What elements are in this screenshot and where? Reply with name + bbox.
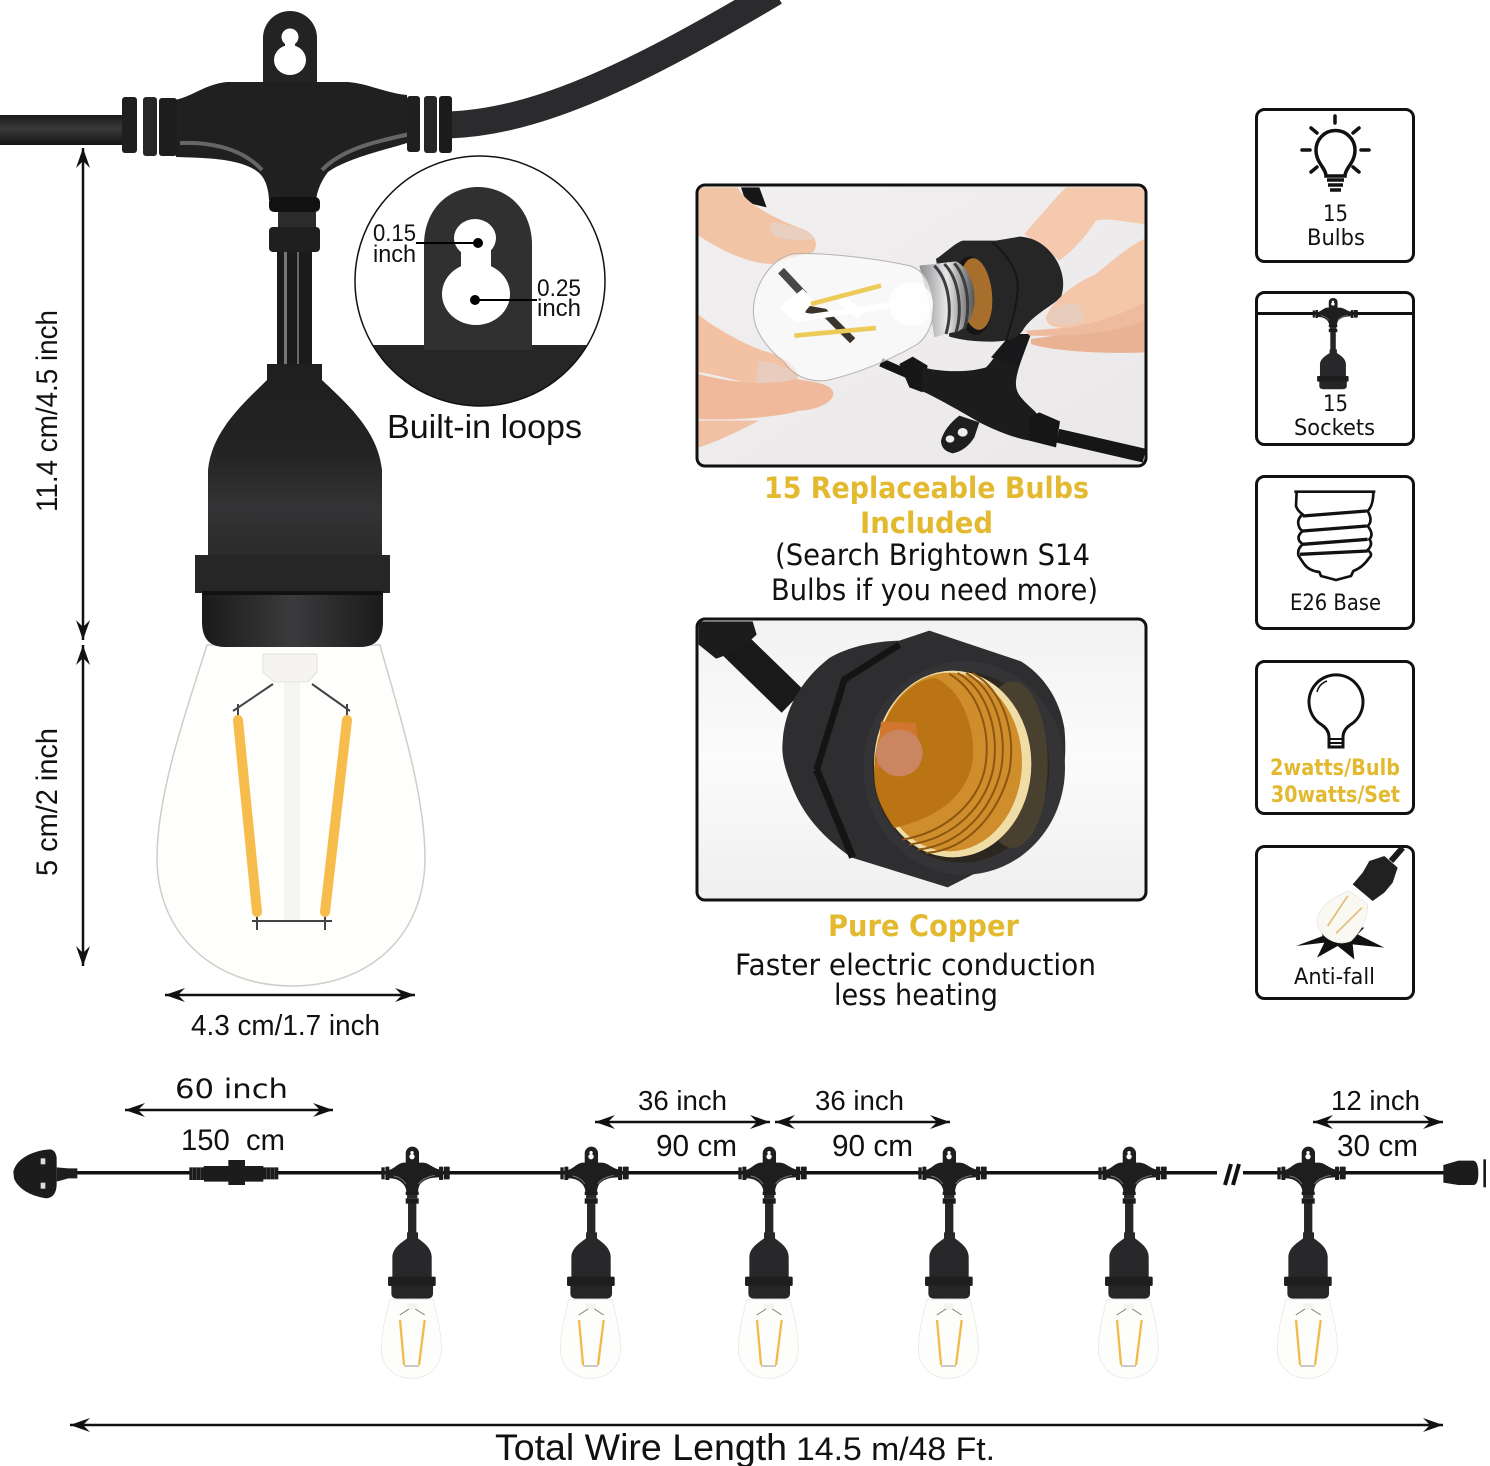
dimension: first 36 inch: 36 inch: [638, 1085, 727, 1116]
total length arrow: [70, 1424, 1443, 1426]
width arrow: [165, 994, 415, 996]
heading pure copper: Pure Copper: [828, 909, 1020, 943]
note faster conduction: less heating: [834, 978, 998, 1012]
label 0.15 inch: inch: [373, 241, 416, 268]
label 0.25 inch: inch: [537, 295, 581, 322]
height arrow top: [82, 148, 84, 640]
plug: [13, 1149, 77, 1198]
photo: replacing bulb: [697, 185, 1146, 466]
bulb: [157, 645, 425, 986]
label socket height: 11.4 cm/4.5 inch: [31, 310, 64, 512]
label 15 sockets: Sockets: [1294, 416, 1375, 441]
small socket and bulb 4: [918, 1147, 987, 1378]
label E26 base: E26 Base: [1290, 591, 1381, 616]
heading replaceable bulbs: 15 Replaceable Bulbs: [764, 471, 1089, 505]
small socket and bulb 3: [738, 1147, 807, 1378]
note search bulbs: Bulbs if you need more): [771, 573, 1098, 607]
label bulb width: 4.3 cm/1.7 inch: [191, 1010, 380, 1042]
label anti-fall: Anti-fall: [1294, 965, 1375, 990]
label 30 watts per set: 30watts/Set: [1271, 783, 1400, 808]
icon: globe bulb: [1309, 675, 1363, 747]
small socket and bulb 2: [560, 1147, 629, 1378]
large hole dot: [470, 295, 480, 305]
dimension: 60 inch: 60 inch: [175, 1074, 288, 1105]
label 2 watts per bulb: 2watts/Bulb: [1270, 756, 1400, 781]
dimension: 12 inch: 30 cm: [1337, 1128, 1418, 1163]
small socket and bulb 1: [381, 1147, 450, 1378]
left cable: [0, 115, 125, 145]
dimension: 12 inch: [1313, 1085, 1443, 1163]
icon: falling bulb with impact star: [1293, 848, 1403, 959]
photo: copper socket: [697, 619, 1146, 900]
dimension: first 36 inch: [595, 1085, 770, 1163]
note search bulbs: (Search Brightown S14: [775, 538, 1090, 572]
small socket and bulb 5: [1098, 1147, 1167, 1378]
inline connector: [189, 1160, 278, 1185]
icon: light bulb: [1302, 116, 1369, 190]
label 0.15 inch: 0.15: [373, 220, 416, 247]
dimension: 60 inch: [125, 1074, 333, 1157]
feature box: 15 sockets: [1256, 292, 1414, 444]
built-in loop detail circle: [354, 155, 606, 407]
dimension: 12 inch: 12 inch: [1331, 1085, 1420, 1116]
small socket and bulb 6: [1277, 1147, 1346, 1378]
feature box: wattage: [1256, 662, 1414, 814]
label built-in loops: Built-in loops: [387, 408, 582, 445]
small hole marker: [416, 242, 478, 244]
feature box: E26 base: [1256, 476, 1414, 628]
dimension: 60 inch: 150 cm: [181, 1124, 285, 1157]
wire: [1257, 312, 1413, 315]
label 0.25 inch: 0.25: [537, 275, 581, 302]
label 14.5 m / 48 ft: 14.5 m/48 Ft.: [796, 1431, 995, 1466]
label 15 sockets: 15: [1323, 392, 1348, 417]
end socket: [1443, 1159, 1486, 1187]
dimension: first 36 inch: 90 cm: [656, 1128, 737, 1163]
large hole marker: [475, 299, 537, 301]
dimension: second 36 inch: 90 cm: [832, 1128, 913, 1163]
junction and socket: [122, 11, 452, 647]
icon: E26 screw base: [1294, 492, 1375, 580]
feature box: anti-fall: [1256, 846, 1414, 998]
icon: socket: [1313, 298, 1358, 389]
height arrow bottom: [82, 645, 84, 966]
feature box: 15 bulbs: [1256, 110, 1414, 262]
note faster conduction: Faster electric conduction: [735, 948, 1096, 982]
string diagram: [13, 1147, 1486, 1378]
wire: [70, 1171, 1445, 1174]
heading included: Included: [860, 506, 993, 540]
right cable: [448, 0, 775, 125]
label 15 bulbs: 15: [1323, 202, 1348, 227]
wire break mark: [1225, 1164, 1239, 1185]
label bulb height: 5 cm/2 inch: [31, 728, 64, 876]
main socket with bulb: [0, 0, 775, 986]
dimension: second 36 inch: 36 inch: [815, 1085, 904, 1116]
dimension: second 36 inch: [775, 1085, 950, 1163]
small hole dot: [473, 238, 483, 248]
label 15 bulbs: Bulbs: [1307, 226, 1365, 251]
